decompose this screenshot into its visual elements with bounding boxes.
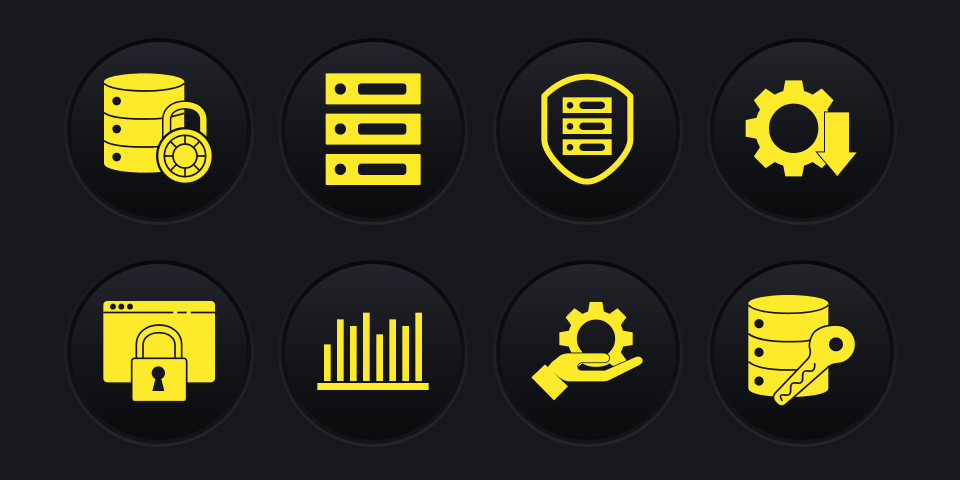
panel: server rack <box>278 35 468 225</box>
icon: shield with servers <box>544 77 630 182</box>
panel: database with key <box>707 257 897 447</box>
panel: bar chart <box>278 257 468 447</box>
panel: shield server <box>493 35 683 225</box>
panel: browser window with padlock <box>64 257 254 447</box>
icon: database and key <box>748 295 856 406</box>
icon: hand and gear <box>531 302 643 400</box>
icon: gear and arrow <box>746 80 857 176</box>
panel: gear with down arrow <box>707 35 897 225</box>
icon: database and padlock <box>104 73 214 185</box>
icon: browser padlock <box>103 301 215 402</box>
icon: server rack <box>326 73 421 185</box>
bar chart <box>317 313 429 390</box>
panel: database with combination lock <box>64 35 254 225</box>
panel: hand holding gear <box>493 257 683 447</box>
